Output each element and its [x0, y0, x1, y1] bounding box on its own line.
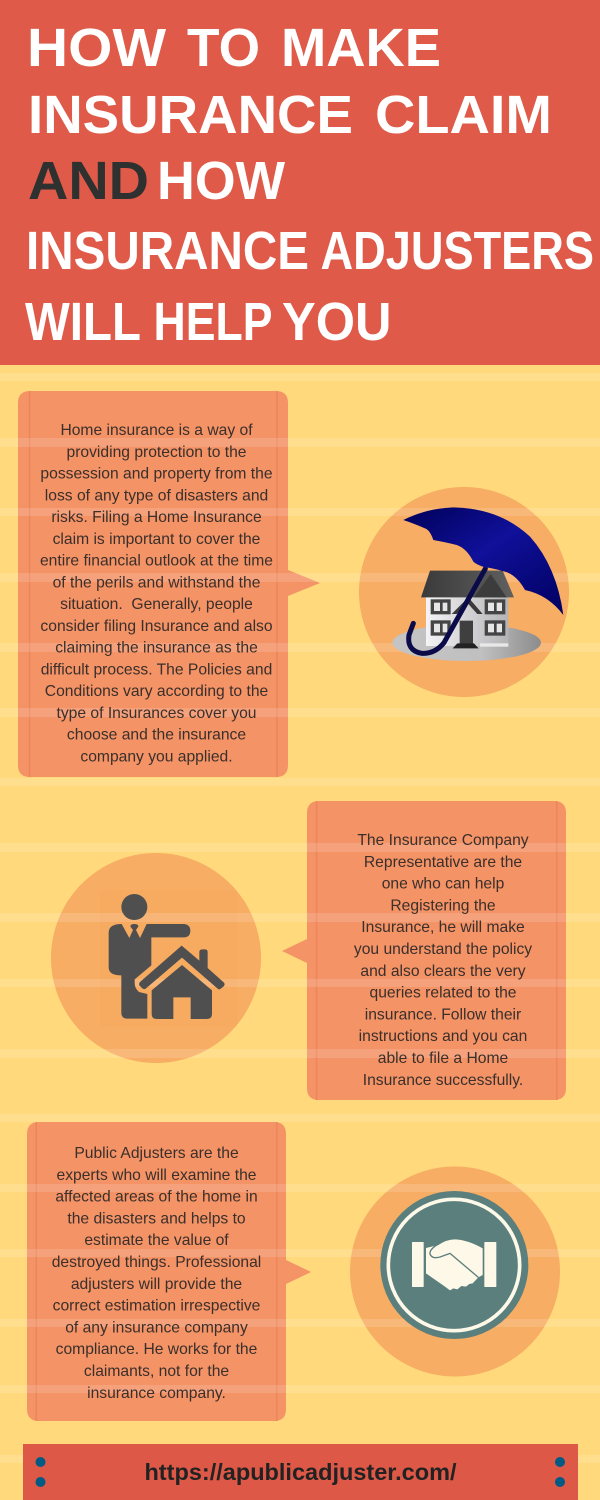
title: WILL	[25, 292, 141, 352]
text: home insurance: claiming the insurance as the	[55, 640, 258, 656]
text: public adjusters: of any insurance company	[65, 1319, 248, 1336]
circle: adjuster backdrop	[51, 853, 261, 1063]
text: company representative: The Insurance Company	[357, 832, 529, 849]
icon: house under umbrella	[392, 507, 563, 661]
text: company representative: Insurance successfully.	[363, 1072, 523, 1089]
text: home insurance: entire financial outlook at the time	[40, 552, 273, 570]
title: INSURANCE	[26, 221, 309, 281]
title: AND	[28, 151, 149, 211]
text: home insurance: difficult process. The Policies and	[41, 661, 272, 678]
title: HOW	[27, 18, 166, 78]
title: HELP	[154, 292, 272, 352]
title: CLAIM	[375, 85, 552, 145]
text: company representative: Insurance, he will make	[361, 919, 525, 936]
footer url: https://apublicadjuster.com/	[144, 1459, 457, 1485]
icon: handshake badge	[380, 1191, 528, 1339]
text: home insurance: risks. Filing a Home Insurance	[51, 509, 262, 526]
icon: left rivets	[36, 1457, 46, 1487]
text: home insurance: situation. Generally, people	[60, 596, 253, 613]
text: company representative: Registering the	[390, 897, 496, 914]
text: public adjusters	[52, 1145, 261, 1402]
text: home insurance: of the perils and withstand the	[53, 574, 260, 591]
circle: umbrella backdrop	[359, 487, 569, 697]
title: INSURANCE	[28, 85, 353, 145]
title: HOW	[157, 151, 285, 211]
text: home insurance: Conditions vary according to the	[45, 683, 268, 700]
text: home insurance: possession and property from the	[40, 466, 273, 482]
header banner	[0, 0, 600, 365]
text: company representative: insurance. Follow their	[365, 1006, 521, 1023]
text: home insurance: providing protection to the	[67, 444, 246, 461]
footer banner	[23, 1444, 578, 1500]
text: public adjusters: insurance company.	[87, 1385, 226, 1402]
title: YOU	[282, 292, 392, 352]
text: home insurance: loss of any type of disasters and	[45, 487, 268, 504]
text: company representative: you understand the policy	[354, 941, 532, 958]
text: company representative: Representative are the	[364, 854, 522, 871]
text: home insurance: claim is important to cover the	[53, 531, 260, 548]
text: public adjusters: affected areas of the home in	[55, 1189, 258, 1206]
text: public adjusters: destroyed things. Professional	[52, 1254, 261, 1271]
circle: handshake backdrop	[350, 1166, 560, 1376]
panel: text box one	[18, 391, 320, 777]
text: public adjusters: correct estimation irrespective	[53, 1298, 260, 1315]
panel: text box two	[282, 801, 566, 1100]
icon: right rivets	[555, 1457, 565, 1487]
title: TO	[187, 18, 260, 78]
text: home insurance: consider filing Insurance and also	[40, 618, 273, 635]
text: home insurance: type of Insurances cover you	[57, 705, 256, 722]
text: company representative: one who can help	[382, 876, 505, 893]
icon: adjuster pointing at house	[109, 894, 225, 1019]
text: home insurance: Home insurance is a way of	[60, 422, 253, 439]
panel: text box three	[27, 1122, 311, 1421]
text: public adjusters: estimate the value of	[84, 1232, 229, 1249]
text: public adjusters: experts who will examine the	[57, 1167, 256, 1184]
text: company representative: queries related to the	[370, 985, 516, 1002]
text: company representative: able to file a Home	[378, 1050, 508, 1067]
text: company representative: instructions and you can	[359, 1028, 527, 1045]
text: company representative	[354, 832, 532, 1089]
text: public adjusters: adjusters will provide the	[71, 1276, 242, 1293]
text: public adjusters: Public Adjusters are the	[74, 1145, 239, 1162]
title: MAKE	[281, 18, 441, 78]
text: home insurance: choose and the insurance	[67, 726, 246, 744]
text: home insurance: company you applied.	[80, 748, 233, 765]
text: public adjusters: claimants, not for the	[84, 1363, 229, 1380]
text: company representative: and also clears the very	[360, 963, 526, 980]
text: public adjusters: the disasters and helps to	[67, 1210, 246, 1227]
title	[25, 18, 594, 352]
text: home insurance	[40, 422, 273, 765]
text: public adjusters: compliance. He works for the	[56, 1341, 257, 1358]
